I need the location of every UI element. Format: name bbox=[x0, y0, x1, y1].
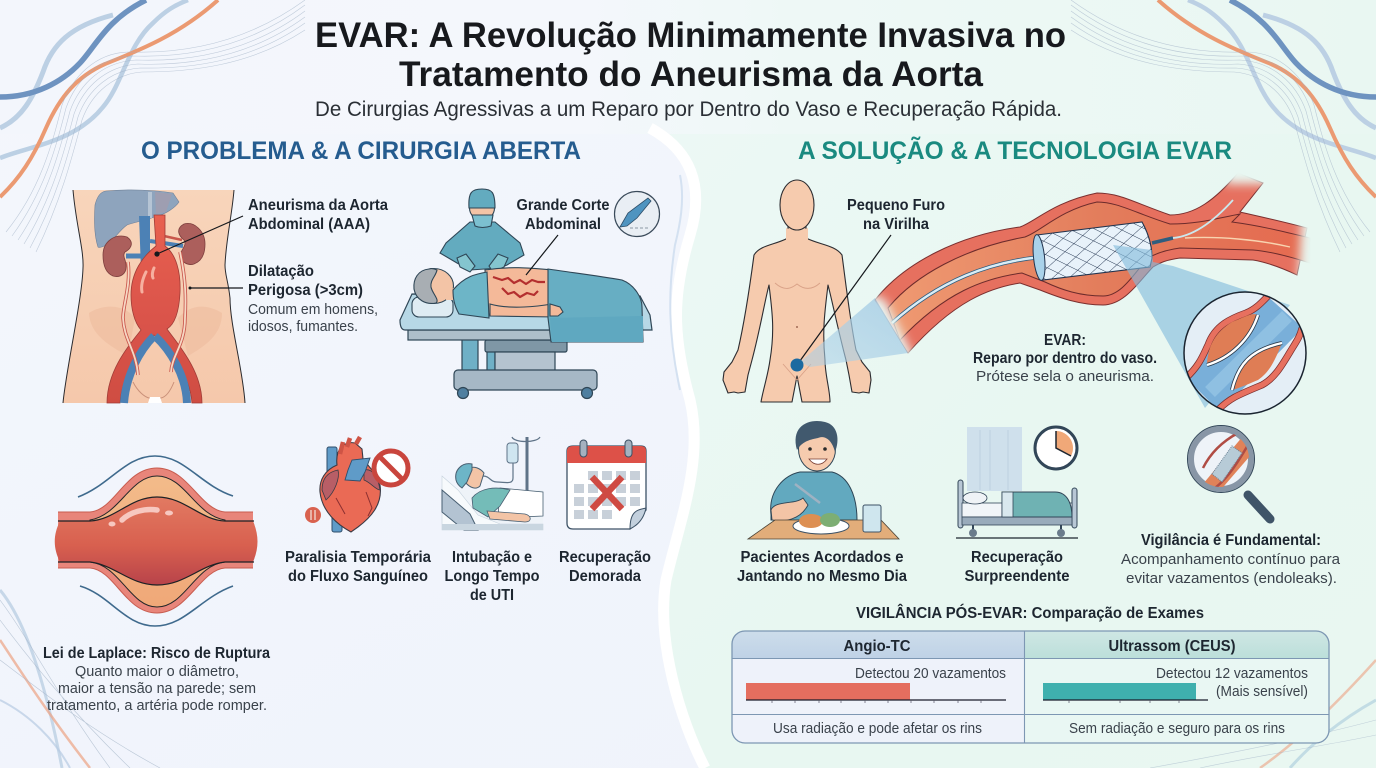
text: intubation and ICU bbox=[444, 549, 540, 604]
panel: problem and open surgery bbox=[43, 189, 660, 714]
surgeon bbox=[440, 189, 524, 272]
heading: problem: O PROBLEMA & A CIRURGIA ABERTA bbox=[141, 137, 581, 165]
patient bbox=[412, 268, 643, 342]
text: Laplace law: tratamento, a artéria pode romper. bbox=[47, 698, 267, 714]
text: temporary flow paralysis bbox=[285, 549, 431, 585]
text: EVAR repair bbox=[973, 332, 1157, 385]
label: dangerous dilation: Perigosa (>3cm) bbox=[248, 282, 363, 299]
text: EVAR repair: EVAR: bbox=[1044, 332, 1086, 349]
illustration: aorta with stent graft bbox=[875, 173, 1310, 353]
column: Ultrassom CEUS: Detectou 12 vazamentos bbox=[1156, 666, 1308, 682]
leader line: aneurysm bbox=[154, 216, 243, 257]
heading: solution: A SOLUÇÃO & A TECNOLOGIA EVAR bbox=[798, 135, 1232, 165]
column: Angio-TC bbox=[746, 638, 1006, 737]
text: EVAR repair: Prótese sela o aneurisma. bbox=[976, 369, 1154, 385]
text: intubation and ICU: Intubação e bbox=[452, 549, 532, 566]
zoom cone: groin to vessel bbox=[800, 298, 908, 367]
label: abdominal aortic aneurysm: Abdominal (AAA) bbox=[248, 216, 370, 233]
icon: heart with blocked flow bbox=[305, 437, 408, 532]
text: awake and dining same day: Pacientes Acordados e bbox=[740, 549, 904, 566]
column: Ultrassom CEUS: Ultrassom (CEUS) bbox=[1108, 638, 1236, 655]
text: intubation and ICU: de UTI bbox=[470, 587, 514, 604]
label: large abdominal cut: Abdominal bbox=[525, 216, 601, 233]
label: dangerous dilation bbox=[248, 263, 378, 335]
title: Tratamento do Aneurisma da Aorta bbox=[399, 55, 984, 94]
text: temporary flow paralysis: Paralisia Temporária bbox=[285, 549, 431, 566]
column: Ultrassom CEUS: Sem radiação e seguro para os rins bbox=[1069, 721, 1285, 737]
icon: magnifying glass on stent bbox=[1188, 426, 1270, 519]
subtitle: De Cirurgias Agressivas a um Reparo por Dentro do Vaso e Recuperação Rápida. bbox=[315, 98, 1062, 121]
panel: solution and EVAR technology bbox=[723, 173, 1341, 743]
comparison table bbox=[732, 631, 1329, 743]
text: slow recovery bbox=[559, 549, 651, 585]
zoom cone: stent to magnifier bbox=[1113, 245, 1290, 408]
label: dangerous dilation: idosos, fumantes. bbox=[248, 319, 358, 335]
column: Ultrassom CEUS bbox=[1043, 638, 1308, 737]
label: small groin puncture: na Virilha bbox=[863, 216, 929, 233]
label: dangerous dilation: Dilatação bbox=[248, 263, 314, 280]
text: surprising recovery bbox=[964, 549, 1070, 585]
text: Laplace law: Quanto maior o diâmetro, bbox=[75, 664, 239, 680]
text: Laplace law: Lei de Laplace: Risco de Ruptura bbox=[43, 645, 270, 662]
text: awake and dining same day: Jantando no Mesmo Dia bbox=[737, 568, 907, 585]
illustration: abdominal anatomy with aneurysm bbox=[63, 190, 245, 403]
leader line: dilation bbox=[188, 286, 243, 290]
text: Laplace law: maior a tensão na parede; sem bbox=[58, 681, 256, 697]
text: surveillance is essential bbox=[1121, 532, 1341, 587]
column: Ultrassom CEUS: (Mais sensível) bbox=[1216, 684, 1308, 700]
column: Angio-TC: Detectou 20 vazamentos bbox=[855, 666, 1006, 682]
leader line: incision bbox=[526, 235, 558, 275]
icon: ICU patient bbox=[442, 437, 543, 530]
label: large abdominal cut bbox=[516, 197, 610, 233]
table frame bbox=[732, 631, 1329, 743]
illustration: Laplace law vessel bbox=[55, 456, 258, 626]
illustration: magnified cross-section bbox=[1184, 292, 1306, 414]
text: surveillance is essential: evitar vazamentos (endoleaks). bbox=[1126, 571, 1337, 587]
icon: hospital bed with clock bbox=[956, 427, 1078, 538]
text: surprising recovery: Surpreendente bbox=[964, 568, 1070, 585]
text: awake and dining same day bbox=[737, 549, 907, 585]
icon: scalpel bbox=[614, 192, 660, 236]
text: EVAR repair: Reparo por dentro do vaso. bbox=[973, 350, 1157, 367]
illustration: open surgery bbox=[400, 189, 652, 398]
title: EVAR: A Revolução Minimamente Invasiva no bbox=[315, 16, 1066, 55]
icon: calendar with X bbox=[567, 440, 646, 529]
column: Angio-TC: Usa radiação e pode afetar os rins bbox=[773, 721, 982, 737]
illustration: human body bbox=[723, 180, 871, 402]
icon: patient eating bbox=[748, 421, 899, 539]
incision bbox=[493, 277, 545, 297]
title bbox=[315, 16, 1066, 94]
leader line: groin puncture bbox=[790, 235, 891, 372]
text: surprising recovery: Recuperação bbox=[971, 549, 1063, 566]
label: abdominal aortic aneurysm: Aneurisma da Aorta bbox=[248, 197, 388, 214]
heading: exam comparison: VIGILÂNCIA PÓS-EVAR: Comparação de Exames bbox=[856, 603, 1204, 622]
label: small groin puncture bbox=[847, 197, 945, 233]
text: slow recovery: Recuperação bbox=[559, 549, 651, 566]
label: dangerous dilation: Comum em homens, bbox=[248, 302, 378, 318]
label: small groin puncture: Pequeno Furo bbox=[847, 197, 945, 214]
text: slow recovery: Demorada bbox=[569, 568, 641, 585]
label: abdominal aortic aneurysm bbox=[248, 197, 388, 233]
text: temporary flow paralysis: do Fluxo Sanguíneo bbox=[288, 568, 428, 585]
text: intubation and ICU: Longo Tempo bbox=[444, 568, 540, 585]
text: surveillance is essential: Acompanhamento contínuo para bbox=[1121, 552, 1341, 568]
table base bbox=[400, 294, 652, 398]
text: surveillance is essential: Vigilância é Fundamental: bbox=[1141, 532, 1321, 549]
column: Angio-TC: Angio-TC bbox=[844, 638, 910, 655]
label: large abdominal cut: Grande Corte bbox=[516, 197, 610, 214]
text: Laplace law bbox=[43, 645, 270, 714]
